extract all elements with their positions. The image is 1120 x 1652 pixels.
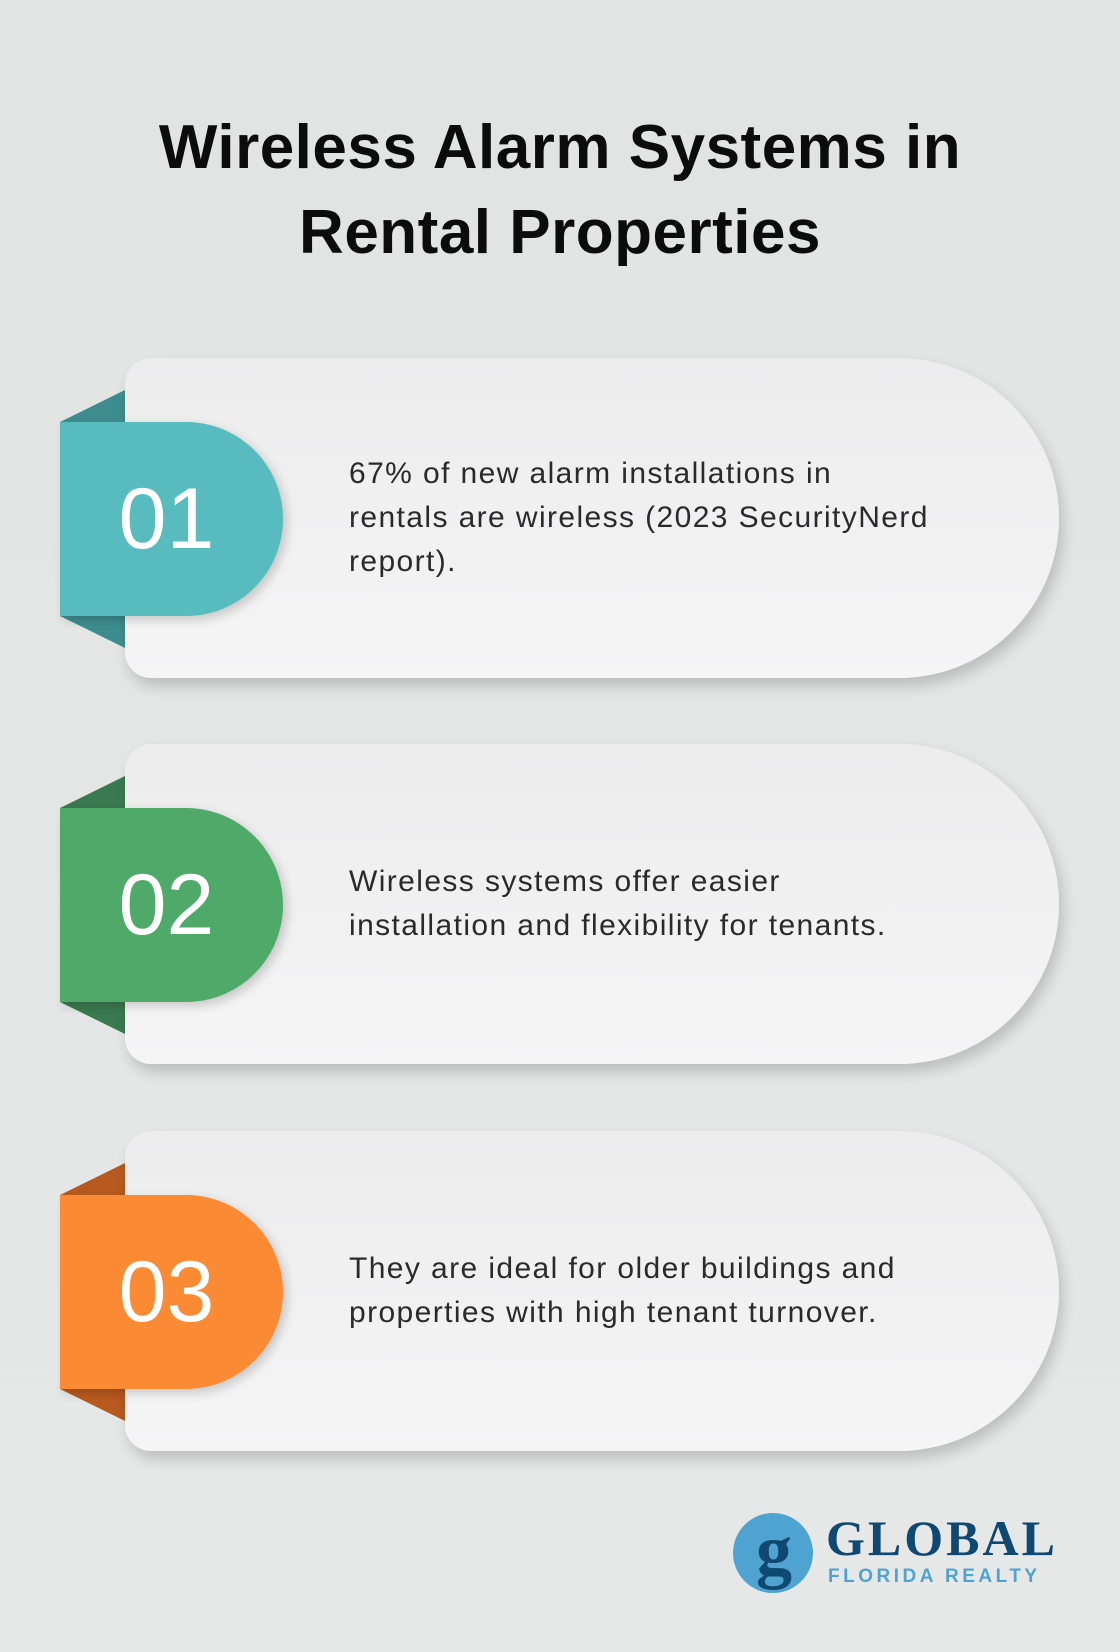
panel: item 3 <box>60 1150 1068 1465</box>
number tab 02 <box>60 808 283 1002</box>
icon: g circle: g <box>756 1512 792 1590</box>
text: item 1: report). <box>349 545 457 578</box>
number tab 03: 03 <box>119 1244 214 1340</box>
number tab 02: 02 <box>119 857 214 953</box>
logo: FLORIDA REALTY <box>828 1566 1041 1587</box>
icon: g circle <box>733 1512 813 1593</box>
fold: item 2 <box>60 776 125 1034</box>
panel: item 2 <box>60 744 1068 1078</box>
text: item 3: They are ideal for older buildings and <box>349 1252 896 1285</box>
number tab 01: 01 <box>119 471 214 567</box>
fold: item 1 <box>60 390 125 648</box>
number tab 03 <box>60 1195 283 1389</box>
logo <box>733 1510 1058 1593</box>
fold: item 3 <box>60 1163 125 1421</box>
text: item 2: Wireless systems offer easier <box>349 865 781 898</box>
title <box>159 113 961 267</box>
text: item 1 <box>349 457 929 578</box>
text: item 2 <box>349 865 887 942</box>
card: item 2 <box>125 744 1059 1064</box>
text: item 2: installation and flexibility for tenants. <box>349 909 887 942</box>
number tab 01 <box>60 422 283 616</box>
text: item 1: 67% of new alarm installations in <box>349 457 832 490</box>
text: item 1: rentals are wireless (2023 SecurityNerd <box>349 501 929 534</box>
title: Rental Properties <box>299 198 821 267</box>
card: item 1 <box>125 358 1059 678</box>
panel: item 1 <box>60 358 1068 692</box>
logo text: GLOBAL <box>826 1510 1058 1566</box>
text: item 3: properties with high tenant turnover. <box>349 1296 878 1329</box>
title: Wireless Alarm Systems in <box>159 113 961 182</box>
card: item 3 <box>125 1131 1059 1451</box>
text: item 3 <box>349 1252 896 1329</box>
